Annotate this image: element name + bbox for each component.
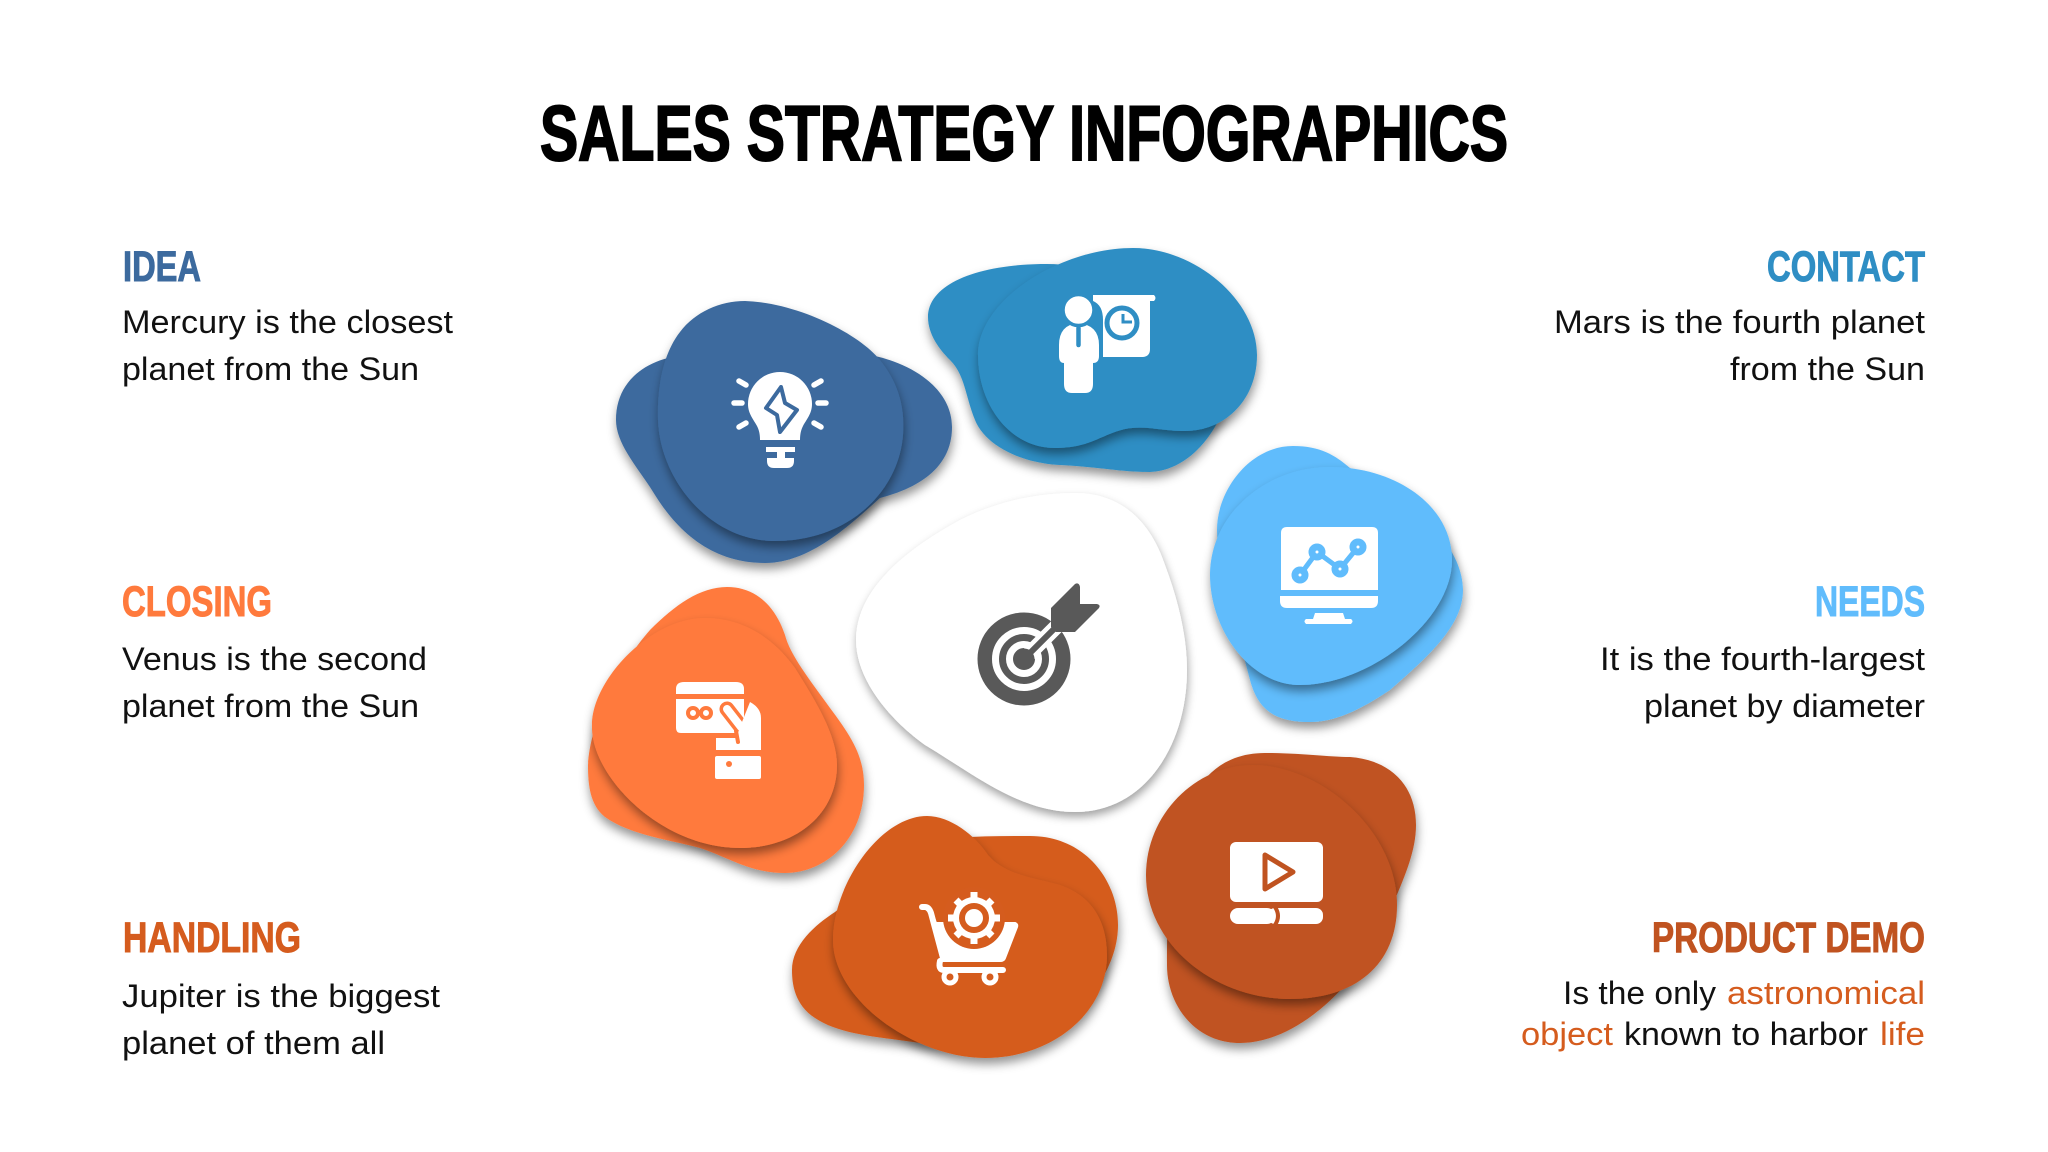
needs front shape bbox=[1210, 467, 1452, 685]
idea back shape bbox=[616, 346, 952, 563]
body: idea bbox=[122, 304, 453, 387]
body: handling: Jupiter is the biggest bbox=[122, 978, 440, 1014]
body: needs: It is the fourth-largest bbox=[1600, 641, 1925, 677]
body: needs bbox=[1600, 641, 1925, 724]
heading: product demo: PRODUCT DEMO bbox=[1652, 914, 1925, 962]
icon: light bulb bbox=[734, 372, 826, 468]
body: closing bbox=[122, 641, 427, 724]
blob: idea bbox=[616, 301, 952, 563]
blob: needs bbox=[1210, 446, 1463, 722]
needs back shape bbox=[1217, 446, 1463, 722]
icon: monitor with line chart bbox=[1280, 527, 1378, 624]
blob: product demo bbox=[1146, 753, 1416, 1043]
body: product demo: object bbox=[1521, 1016, 1613, 1052]
icon: presenter with chart board bbox=[1059, 294, 1156, 393]
text block: closing bbox=[122, 578, 427, 724]
icon: shopping cart with gear bbox=[922, 887, 1017, 983]
heading: handling: HANDLING bbox=[123, 914, 301, 962]
heading: closing: CLOSING bbox=[122, 578, 272, 626]
product demo back shape bbox=[1167, 753, 1416, 1043]
blob: center target bbox=[856, 493, 1187, 812]
body: contact: Mars is the fourth planet bbox=[1554, 304, 1925, 340]
text block: needs bbox=[1600, 578, 1925, 724]
body: contact: from the Sun bbox=[1730, 351, 1925, 387]
heading: needs: NEEDS bbox=[1815, 578, 1925, 626]
body: idea: planet from the Sun bbox=[122, 351, 419, 387]
blob: closing bbox=[588, 587, 864, 873]
contact front shape bbox=[978, 248, 1257, 448]
text block: handling bbox=[122, 914, 440, 1061]
icon: video player bbox=[1230, 842, 1323, 925]
body: product demo: astronomical bbox=[1727, 975, 1925, 1011]
icon: hand with credit card bbox=[676, 682, 761, 779]
idea front shape bbox=[658, 301, 903, 541]
text block: product demo bbox=[1521, 914, 1925, 1052]
body: handling: planet of them all bbox=[122, 1025, 385, 1061]
body: closing: planet from the Sun bbox=[122, 688, 419, 724]
body: product demo: known to harbor bbox=[1624, 1016, 1868, 1052]
body: idea: Mercury is the closest bbox=[122, 304, 453, 340]
closing front shape bbox=[592, 618, 837, 848]
blob: contact bbox=[928, 248, 1257, 472]
body: contact bbox=[1554, 304, 1925, 387]
body: product demo: Is the only bbox=[1563, 975, 1716, 1011]
heading: idea: IDEA bbox=[123, 243, 201, 291]
body: handling bbox=[122, 978, 440, 1061]
center shape bbox=[856, 493, 1187, 812]
icon: target with arrow bbox=[978, 583, 1100, 706]
contact back shape bbox=[928, 264, 1230, 472]
text block: idea bbox=[122, 243, 453, 387]
title: SALES STRATEGY INFOGRAPHICS bbox=[540, 89, 1508, 177]
body: closing: Venus is the second bbox=[122, 641, 427, 677]
body: product demo bbox=[1521, 975, 1925, 1052]
text block: contact bbox=[1554, 243, 1925, 387]
blob: handling bbox=[792, 816, 1118, 1058]
handling back shape bbox=[792, 836, 1118, 1044]
handling front shape bbox=[833, 816, 1107, 1058]
body: needs: planet by diameter bbox=[1644, 688, 1925, 724]
heading: contact: CONTACT bbox=[1767, 243, 1925, 291]
body: product demo: life bbox=[1880, 1016, 1925, 1052]
product demo front shape bbox=[1146, 765, 1397, 999]
closing back shape bbox=[588, 587, 864, 873]
